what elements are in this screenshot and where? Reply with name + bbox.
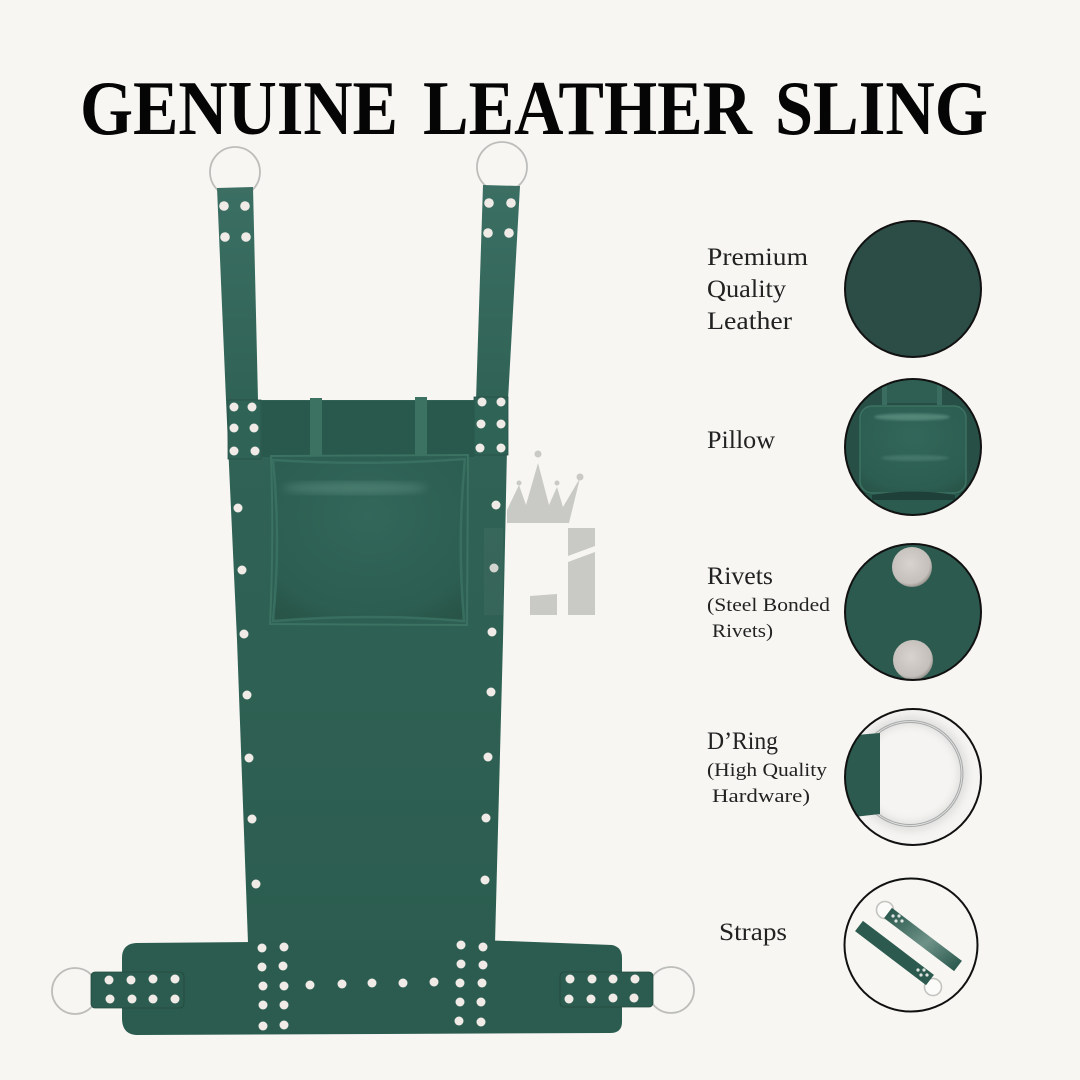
right top patch: [474, 397, 508, 455]
left top patch: [228, 400, 261, 459]
circle outline: [845, 379, 981, 515]
sling main panel with straps: [217, 185, 520, 943]
left bottom tab: [91, 972, 184, 1008]
label: Hardware): [712, 786, 810, 807]
label: D’Ring: [707, 728, 778, 755]
pillow straps: [310, 397, 427, 460]
circle outline: [845, 709, 981, 845]
right bottom D-ring: [648, 967, 694, 1013]
circle outline: [845, 544, 981, 680]
top left D-ring: [210, 147, 260, 197]
product: leather sling: [52, 142, 694, 1035]
feature: rivets: [707, 544, 981, 680]
label: Leather: [707, 308, 793, 335]
circle: D-ring close-up: [846, 714, 970, 833]
circle: straps close-up: [844, 878, 978, 1012]
label: Premium: [707, 244, 809, 271]
watermark: crown logo: [507, 450, 595, 615]
label: [707, 728, 828, 807]
pillow: [270, 455, 468, 625]
label: (High Quality: [707, 760, 828, 781]
label: Rivets): [712, 621, 773, 642]
right bottom tab: [560, 972, 653, 1007]
circle: pillow close-up: [845, 379, 981, 516]
title: LEATHER: [423, 65, 753, 151]
rivets: [104, 198, 640, 1030]
bottom band: [122, 940, 622, 1035]
title: SLING: [775, 65, 988, 151]
label: Rivets: [707, 563, 773, 590]
infographic canvas: [51, 82, 986, 1035]
label: Pillow: [707, 427, 775, 454]
feature: pillow: [707, 379, 981, 516]
feature: D-ring: [707, 709, 981, 845]
label: [707, 563, 831, 642]
title: GENUINE: [80, 65, 398, 151]
feature: premium quality leather: [707, 221, 981, 357]
circle: rivets close-up: [845, 544, 981, 680]
label: Straps: [719, 919, 787, 946]
label: [707, 244, 809, 335]
label: (Steel Bonded: [707, 595, 831, 616]
pillow shadow panel: [262, 401, 474, 457]
feature: straps: [719, 878, 978, 1012]
left bottom D-ring: [52, 968, 98, 1014]
title: [80, 65, 988, 151]
circle: leather texture: [845, 221, 981, 357]
top right D-ring: [477, 142, 527, 192]
watermark ghost over panel: [484, 528, 503, 615]
label: Quality: [707, 276, 787, 303]
